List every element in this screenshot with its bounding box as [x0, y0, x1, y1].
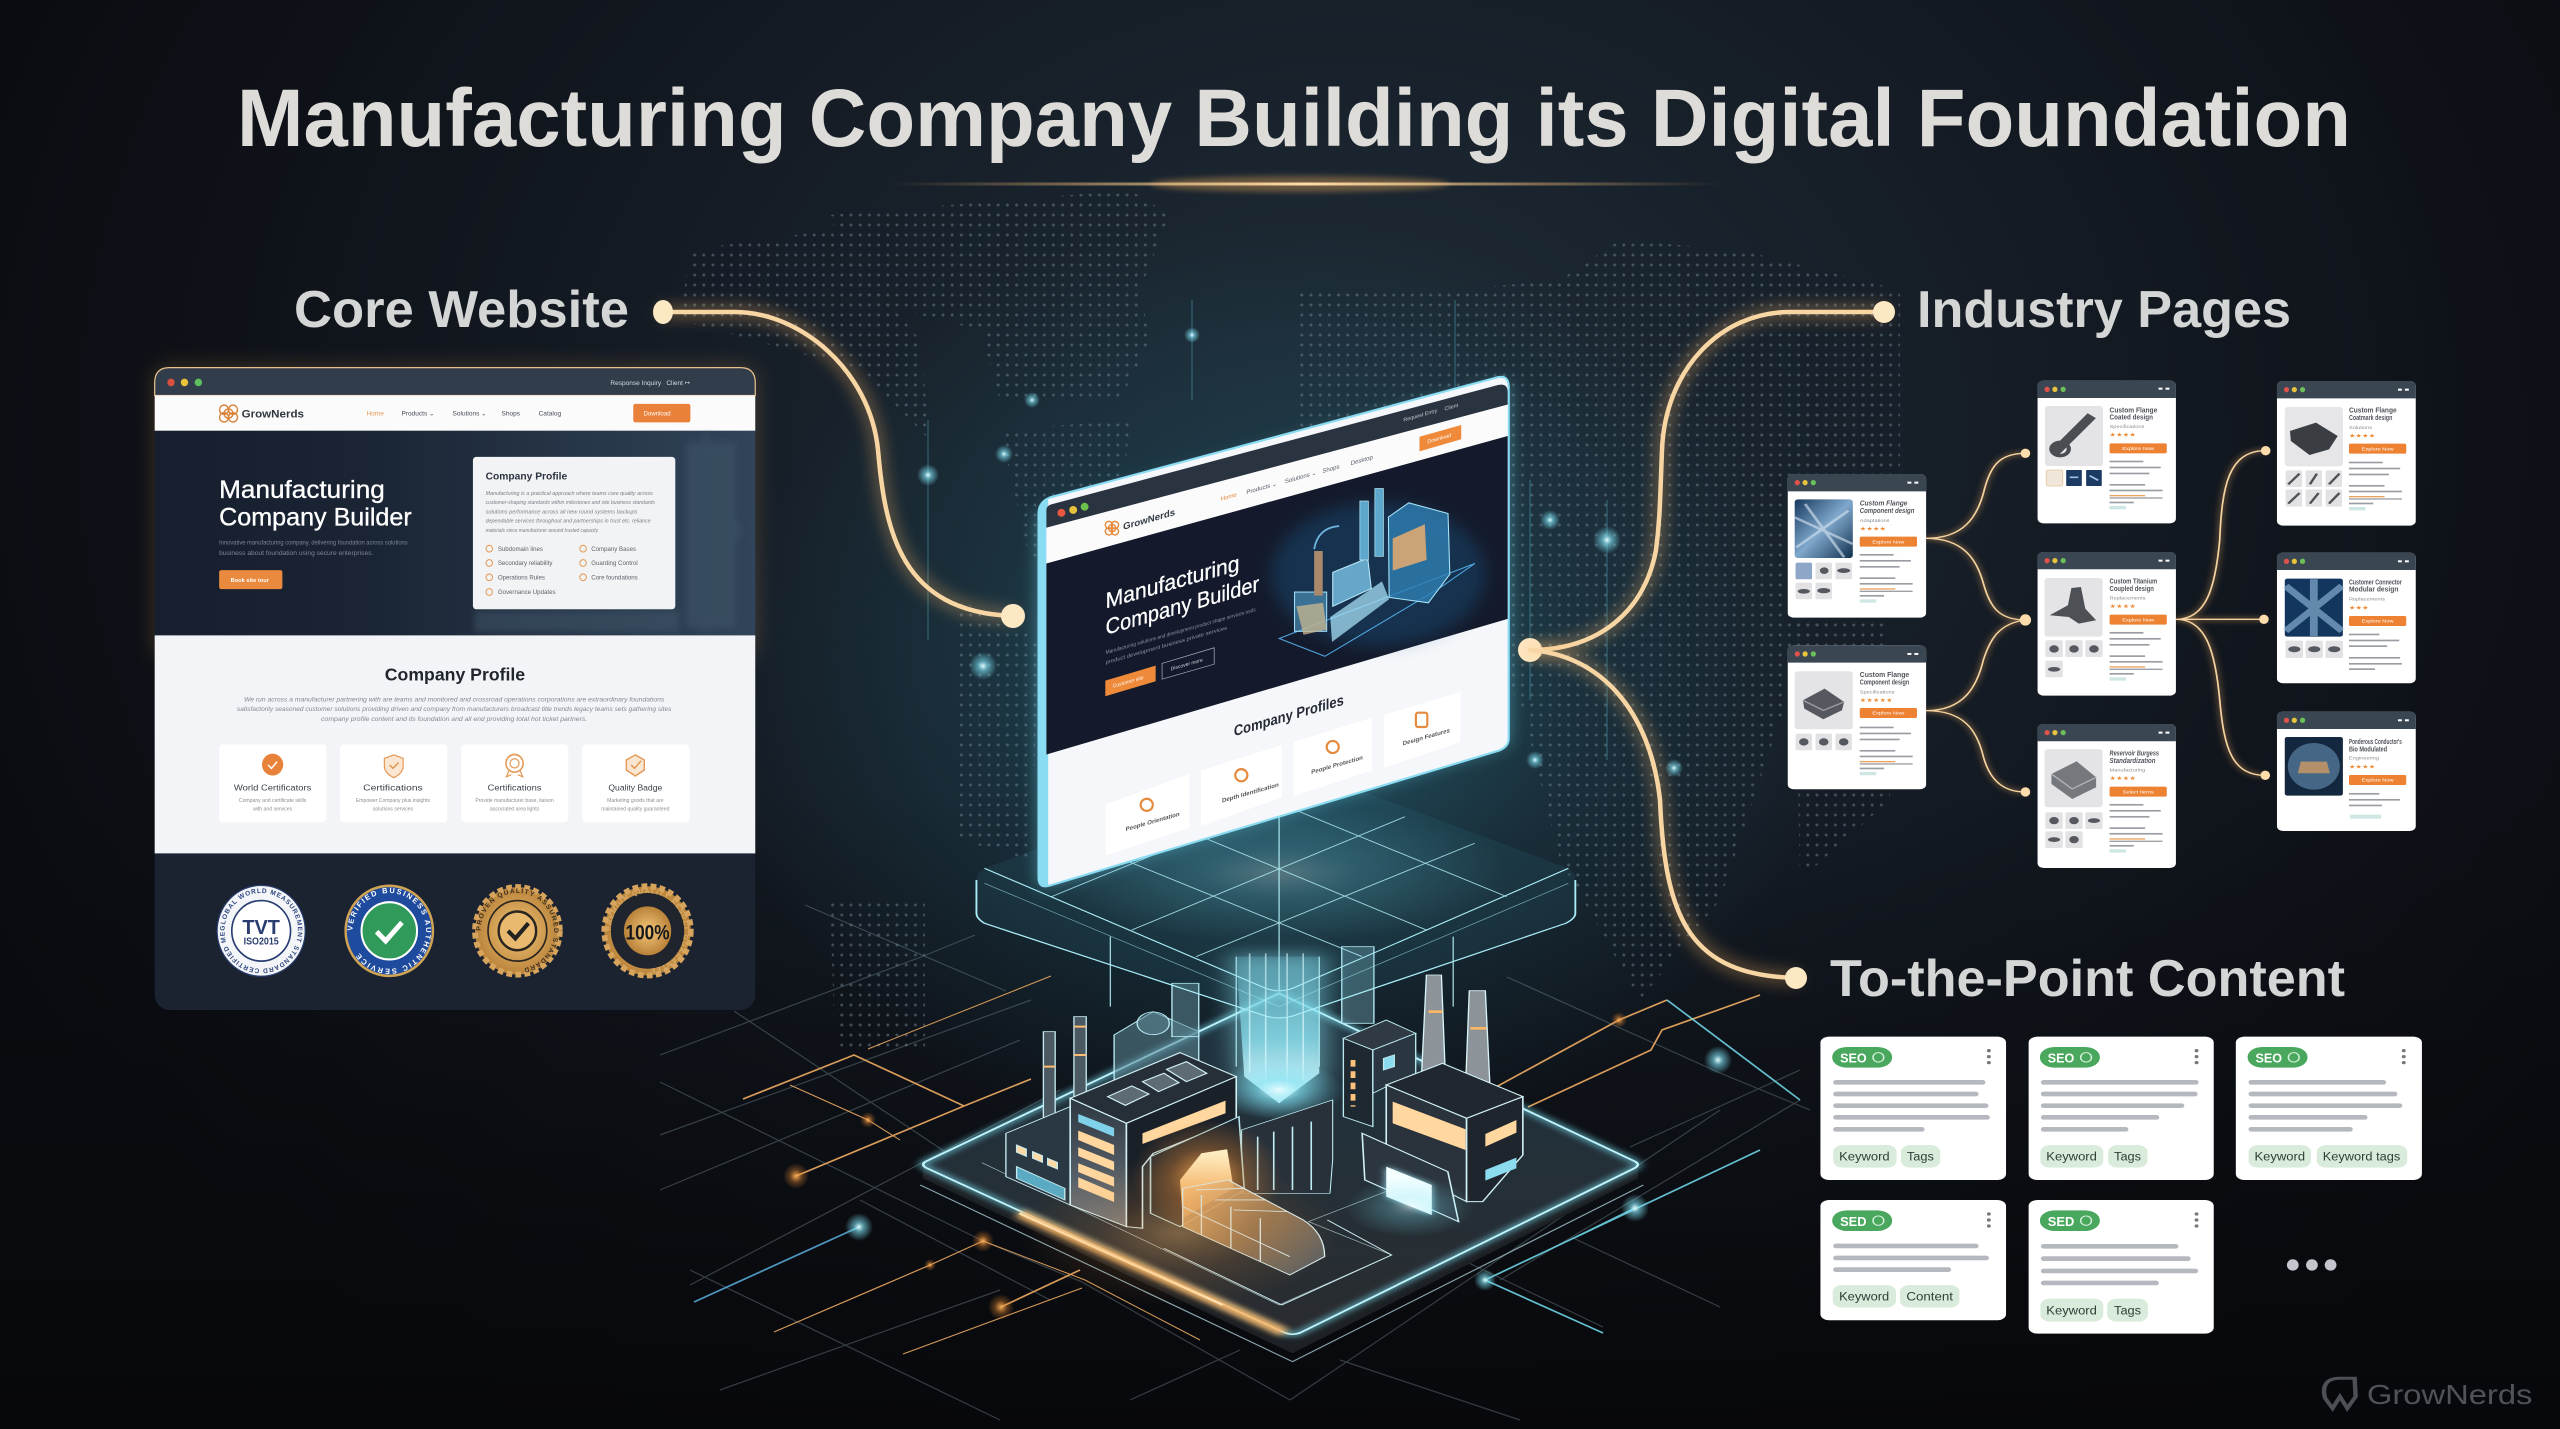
product card: right center: Replacements — [2349, 597, 2385, 602]
certification card 3: Provide manufacturer base, liaison — [475, 798, 554, 804]
SEO card 1 — [1820, 1037, 2006, 1180]
certification card 4: Marketing goods that are — [607, 798, 664, 804]
title underline — [889, 176, 1721, 192]
glowing gate — [1132, 1117, 1282, 1233]
SEO card 2: Tags — [2114, 1150, 2141, 1163]
product card: right center — [2277, 553, 2416, 683]
factory on glowing platform — [920, 947, 1643, 1362]
company profile overlay card: solutions performance across all new round systems backups — [486, 509, 638, 515]
SEO card 5 — [2029, 1200, 2214, 1334]
middle tower — [1343, 1020, 1416, 1127]
hero banner: Innovative manufacturing company, delivering foundation across solutions — [219, 539, 408, 546]
product card: middle top: Explore Now — [2122, 447, 2155, 452]
product card: middle center — [2038, 552, 2176, 696]
product card: right top: Coatmark design — [2349, 414, 2392, 422]
company profile section: company profile content and its foundation and all end providing total hot ticket partners. — [321, 716, 587, 723]
product card: right top: Solutions — [2349, 426, 2373, 431]
company profile overlay card: Operations Rules — [498, 574, 545, 581]
product card: middle top: Coated design — [2110, 414, 2153, 421]
badge: 100 percent seal: PREMIUM QUALITY RESULT GUARANTEE — [606, 888, 689, 973]
left chimneys — [1043, 1017, 1086, 1138]
center website window — [1039, 377, 1509, 888]
company profile section: We run across a manufacturer partnering with are teams and monitored and crossroad operations corporations are extraordinary foundations — [244, 696, 664, 703]
SEO card 4: Keyword — [1839, 1290, 1889, 1304]
label: to-the-point content: To-the-Point Content — [1830, 950, 2345, 1008]
hero mini factory — [1271, 489, 1486, 656]
certification card 2 — [340, 744, 447, 822]
floating light nodes — [917, 300, 1683, 780]
window nav bar: Download — [1427, 433, 1451, 445]
hero banner: Manufacturing — [219, 476, 385, 504]
connector: core website — [653, 300, 1025, 628]
product card: left top: Explore Now — [1872, 540, 1905, 545]
certification card 3: associated area lights — [490, 806, 540, 812]
certification card 4: maintained quality guaranteed — [601, 806, 670, 812]
conveyor — [1183, 1180, 1325, 1275]
certification card 4 — [582, 744, 690, 822]
certification card 1 — [219, 744, 326, 822]
company profile section: satisfactorily seasoned customer solutions providing driven and company from manufacturers broadcast title trends legacy teams sets gathering sites — [237, 706, 671, 713]
product card: left bottom: Specifications — [1860, 690, 1895, 695]
connector: industry pages — [1518, 301, 1895, 662]
company profile section — [155, 635, 755, 853]
profile cards: People Orientation — [1126, 811, 1180, 833]
nav bar: GrowNerds — [242, 408, 304, 420]
product card: middle center: Replacements — [2110, 596, 2146, 601]
certification card 3: Certifications — [488, 782, 541, 792]
product card: left bottom — [1788, 645, 1926, 789]
badge: certified seal: TVT — [242, 917, 280, 939]
company profile overlay card — [473, 457, 675, 609]
product card: left bottom: Custom Flange — [1860, 671, 1910, 679]
watermark logo — [2324, 1378, 2532, 1410]
product card: middle bottom — [2038, 724, 2176, 868]
light beam — [1215, 953, 1343, 1120]
product page cards — [1788, 381, 2416, 868]
product card: left top: Custom Flange — [1860, 500, 1908, 507]
product card: middle top: Specifications — [2110, 425, 2145, 430]
product card: middle center: Coupled design — [2110, 585, 2154, 593]
SEO card 3: SEO — [2255, 1052, 2282, 1066]
product card: right center: Explore Now — [2362, 619, 2394, 624]
badge: gold approved seal: PROVEN QUALITY ASSURED STANDARD — [476, 888, 559, 972]
product card: middle bottom: Manufacturing — [2110, 768, 2145, 773]
window hero: Company Builder — [1106, 571, 1260, 640]
product card: middle bottom: Select Items — [2123, 790, 2154, 795]
product card: left bottom: Component design — [1860, 678, 1909, 686]
SEO card 3: Keyword — [2254, 1150, 2305, 1163]
bright loading door — [1346, 1167, 1475, 1237]
certification card 1: with and services — [253, 806, 293, 812]
product card: middle bottom: Reservoir Burgess — [2110, 750, 2159, 757]
nav bar: Catalog — [539, 411, 561, 418]
window nav bar: Home — [1221, 491, 1237, 503]
company profile overlay card: customer-shaping standards within milestones and site business standards — [486, 500, 655, 506]
window nav bar: Request Entry — [1403, 408, 1438, 424]
company profile overlay card: materials since manufacturer around trusted capacity. — [486, 528, 599, 534]
certification card 2: Empower Company plus insights — [356, 798, 430, 804]
nav bar — [155, 395, 755, 431]
window hero — [1046, 436, 1508, 754]
nav bar: Solutions ⌄ — [453, 411, 487, 418]
label: industry pages: Industry Pages — [1917, 281, 2291, 339]
product card: right top: ★★★★ — [2349, 432, 2375, 439]
right building — [1362, 1063, 1523, 1222]
badge: certified seal — [216, 884, 306, 977]
window nav bar — [1046, 403, 1508, 563]
hero banner: Book site tour — [231, 578, 270, 584]
orange floor glow — [1019, 1160, 1341, 1307]
product card: left top — [1788, 474, 1926, 618]
window hero: Customer site — [1113, 675, 1144, 690]
SEO card 5: Keyword — [2046, 1304, 2097, 1317]
product card: right bottom: ★★★★ — [2349, 763, 2375, 770]
certification card 2: solutions services — [373, 806, 413, 812]
window nav bar: Solutions ⌄ — [1285, 470, 1317, 485]
dotted world map — [680, 190, 1900, 1050]
SEO card 3: Keyword tags — [2323, 1150, 2401, 1163]
product card: left top: Component design — [1860, 507, 1914, 515]
platform base — [920, 993, 1643, 1362]
window body — [155, 368, 755, 1010]
left main building — [1070, 1053, 1236, 1228]
company profile overlay card: Company Profile — [486, 472, 568, 483]
window nav bar: Shops — [1322, 463, 1340, 475]
more items ellipsis — [2287, 1259, 2336, 1271]
company profile section: Company Profile — [385, 664, 525, 684]
window hero: Manufacturing — [1106, 550, 1240, 613]
window nav bar: GrowNerds — [1123, 507, 1176, 533]
label: core website: Core Website — [294, 281, 629, 339]
badge: certified seal: ISO2015 — [244, 936, 279, 947]
product card: right top: Explore Now — [2362, 447, 2394, 452]
product card: middle bottom: Standardization — [2110, 757, 2156, 765]
SEO card 5: Tags — [2114, 1304, 2141, 1317]
profile cards: People Protection — [1311, 754, 1363, 776]
company profile overlay card: Governance Updates — [498, 589, 556, 596]
profile cards — [1106, 692, 1461, 856]
title: Manufacturing Company Building its Digital Foundation — [237, 73, 2351, 164]
product card: left top: Adaptations — [1860, 519, 1890, 524]
certification card 2: Certifications — [363, 782, 423, 792]
connector: to-the-point content — [1530, 650, 1807, 989]
window hero: product development business private services — [1106, 625, 1227, 666]
window frame — [1039, 377, 1509, 886]
window heading: company profiles: Company Profiles — [1234, 692, 1344, 740]
certification card 1: Company and certificate skills — [239, 798, 307, 804]
window hero: Manufacturing solutions and development product shape services tools — [1106, 607, 1256, 656]
SEO card 1: Keyword — [1839, 1150, 1890, 1163]
product card: middle top — [2038, 381, 2176, 523]
product card: right center: Modular design — [2349, 586, 2398, 593]
left low building — [1006, 1107, 1070, 1205]
badge: blue verified seal: VERIFIED BUSINESS AUTHENTIC SERVICE — [347, 888, 432, 974]
product card: right center: ★★★ — [2349, 604, 2369, 611]
product card: middle bottom: ★★★★ — [2110, 775, 2136, 782]
nav bar: Download — [643, 411, 671, 418]
product card: right bottom: Explore Now — [2362, 778, 2394, 783]
product card: middle center: ★★★★ — [2110, 603, 2136, 610]
SEO card 2: SEO — [2048, 1052, 2074, 1066]
product card: left bottom: Explore Now — [1872, 711, 1905, 716]
product card: middle top: ★★★★ — [2110, 431, 2136, 438]
company profile overlay card: Guarding Control — [591, 560, 638, 567]
product card: right top — [2277, 381, 2416, 526]
SEO card 4 — [1820, 1200, 2006, 1320]
window left bevel — [1039, 499, 1048, 887]
nav bar: Shops — [501, 411, 521, 418]
right chimneys — [1421, 975, 1491, 1102]
window glow — [1039, 381, 1509, 888]
company profile overlay card: dependable services throughout and partnerships in trust etc. reliance — [486, 519, 651, 525]
SEO card 1: Tags — [1907, 1150, 1934, 1163]
browser title bar: Client ↦ — [666, 380, 691, 387]
product card: middle center: Explore Now — [2122, 618, 2155, 623]
window nav bar: Client — [1444, 403, 1459, 413]
product card: middle center: Custom Titanium — [2110, 578, 2157, 585]
product card: left bottom: ★★★★★ — [1860, 697, 1893, 704]
back tank building — [1114, 947, 1374, 1113]
window nav bar: Desktop — [1351, 454, 1373, 467]
product card: left top: ★★★★ — [1860, 525, 1886, 532]
product card: right top: Custom Flange — [2349, 407, 2397, 414]
window glow — [152, 365, 758, 660]
industry page branches — [1926, 446, 2270, 797]
SEO card 2: Keyword — [2046, 1150, 2097, 1163]
product card: right bottom — [2277, 712, 2416, 831]
window nav bar: Products ⌄ — [1246, 481, 1277, 496]
SEO card 4: Content — [1906, 1290, 1954, 1304]
browser title bar: Response Inquiry — [610, 380, 662, 387]
holographic slab — [976, 760, 1575, 1067]
product card: right bottom: Bio Modulated — [2349, 745, 2387, 753]
window hero: Discover more — [1171, 657, 1203, 673]
company profile overlay card: Manufacturing is a practical approach where teams care quality across — [486, 491, 653, 497]
browser title bar — [155, 368, 755, 395]
company profile overlay card: Company Bases — [591, 546, 636, 553]
product card: middle top: Custom Flange — [2110, 406, 2158, 414]
SEO content cards — [1820, 1037, 2532, 1410]
hero banner — [155, 431, 755, 635]
certification card 1: World Certificators — [234, 782, 311, 792]
certification card 3 — [461, 744, 568, 822]
product card: right bottom: Engineering — [2349, 756, 2379, 761]
floor circuit lines — [660, 905, 1810, 1420]
badge: 100 percent seal: 100% — [626, 921, 670, 944]
SEO card 4: SED — [1840, 1216, 1867, 1229]
SEO card 2 — [2029, 1037, 2214, 1180]
product card: right center: Customer Connector — [2349, 578, 2402, 586]
central teal glow — [710, 220, 1830, 1160]
SEO card 1: SEO — [1840, 1052, 1867, 1066]
badge: certified seal: GLOBAL WORLD MEASUREMENT STANDARD CERTIFIED MEMBER — [220, 888, 302, 974]
SEO card 5: SED — [2048, 1216, 2074, 1229]
company profile overlay card: Core foundations — [591, 574, 638, 581]
SEO card 3 — [2236, 1037, 2422, 1180]
certification card 4: Quality Badge — [608, 782, 663, 792]
company profile overlay card: Subdomain lines — [498, 546, 543, 553]
profile cards: Depth Identification — [1222, 781, 1279, 805]
product card: right bottom: Ponderous Conductor's — [2349, 738, 2402, 746]
hero banner: Company Builder — [219, 503, 412, 532]
nav bar: Home — [366, 411, 384, 418]
profile cards: Design Features — [1403, 727, 1450, 748]
hero banner: business about foundation using secure enterprises. — [219, 550, 374, 557]
company profile overlay card: Secondary reliability — [498, 560, 553, 567]
window title bar — [1046, 385, 1508, 528]
nav bar: Products ⌄ — [402, 411, 435, 418]
panel: core website window — [144, 356, 766, 1010]
central hall — [1242, 1100, 1333, 1193]
